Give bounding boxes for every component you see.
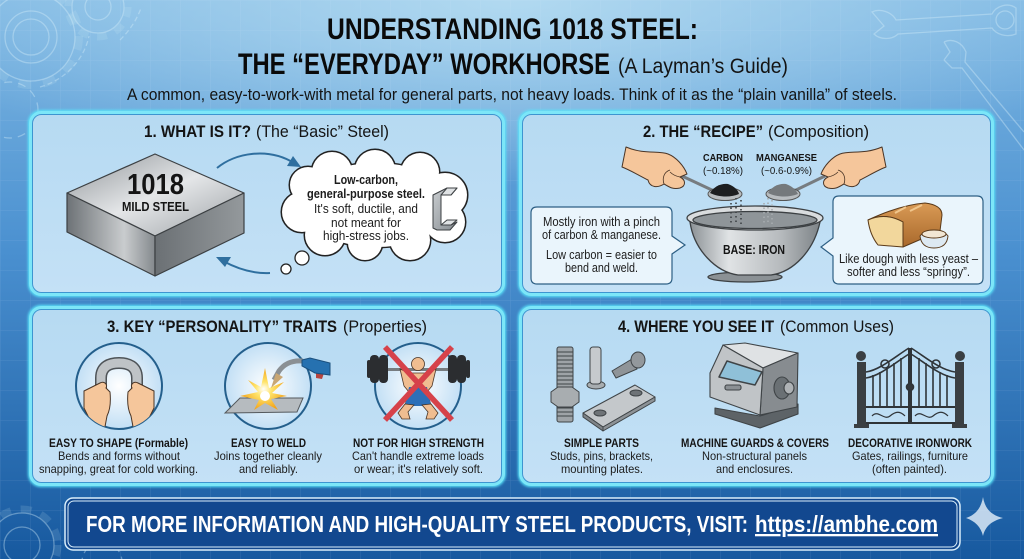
text: not for high strength: NOT FOR HIGH STRENGTH xyxy=(353,436,484,450)
cloud text: general-purpose steel. xyxy=(307,187,425,201)
icon: welding torch xyxy=(225,343,330,429)
text: simple parts: mounting plates. xyxy=(561,462,643,476)
text: easy to weld xyxy=(214,436,322,476)
text: easy to weld: Joins together cleanly xyxy=(214,449,322,463)
text: ironwork: (often painted). xyxy=(872,462,947,476)
icon: machine guard xyxy=(710,343,798,428)
arrow: block to cloud xyxy=(217,154,301,168)
text: machine guards: and enclosures. xyxy=(716,462,793,476)
icon: sparkle xyxy=(966,497,1003,536)
text: easy to shape: Bends and forms without xyxy=(58,449,181,463)
thought cloud xyxy=(281,150,467,274)
heading 4: 4. WHERE YOU SEE IT xyxy=(618,317,775,336)
text: simple parts: SIMPLE PARTS xyxy=(564,436,639,450)
carbon label xyxy=(703,152,743,177)
callout: dough xyxy=(821,196,983,284)
heading 2: 2. THE “RECIPE” xyxy=(643,122,763,141)
cloud text: not meant for xyxy=(331,216,401,230)
callout: dough: Like dough with less yeast – xyxy=(839,252,978,266)
text: ironwork xyxy=(848,436,972,476)
panel 3: traits xyxy=(30,307,504,485)
carbon label: (~0.18%) xyxy=(703,165,743,177)
cloud text: It's soft, ductile, and xyxy=(314,202,418,216)
text: easy to shape: snapping, great for cold working. xyxy=(39,462,198,476)
panel 1: what is it xyxy=(30,112,504,295)
callout: mostly iron: of carbon & manganese. xyxy=(542,228,661,242)
heading 1: 1. WHAT IS IT? xyxy=(144,122,251,141)
callout: dough: softer and less “springy”. xyxy=(847,265,970,279)
heading 2: (Composition) xyxy=(768,122,869,141)
steel block: 1018 xyxy=(127,169,184,201)
heading 1 xyxy=(144,122,389,141)
callout: mostly iron: bend and weld. xyxy=(565,261,638,275)
icon: iron gate xyxy=(854,348,967,428)
title: THE “EVERYDAY” WORKHORSE xyxy=(238,48,610,81)
text: easy to shape xyxy=(39,436,198,476)
callout: mostly iron xyxy=(531,207,685,284)
cloud text xyxy=(307,173,425,243)
text: easy to shape: EASY TO SHAPE (Formable) xyxy=(49,436,188,450)
steel block: MILD STEEL xyxy=(122,199,189,214)
manganese label: (~0.6-0.9%) xyxy=(761,165,812,177)
text: not for high strength: Can't handle extreme loads xyxy=(352,449,484,463)
subtitle: A common, easy-to-work-with metal for general parts, not heavy loads. Think of it as the “plain vanilla” of steels. xyxy=(127,86,897,104)
arrow: cloud to block xyxy=(216,257,270,273)
title: UNDERSTANDING 1018 STEEL: xyxy=(327,13,698,46)
heading 4 xyxy=(618,317,894,336)
text: ironwork: DECORATIVE IRONWORK xyxy=(848,436,972,450)
icon: crossed-out weightlifter xyxy=(367,343,470,429)
title xyxy=(238,13,788,81)
manganese label xyxy=(756,152,817,177)
icon: steel channel xyxy=(433,188,457,230)
decoration: wrenches top right xyxy=(872,5,1024,150)
title: (A Layman’s Guide) xyxy=(618,55,788,78)
left hand with carbon spoon xyxy=(622,147,742,200)
footer banner xyxy=(65,498,960,550)
text: not for high strength xyxy=(352,436,484,476)
icon: bread loaf and bowl xyxy=(868,203,948,248)
heading 3: 3. KEY “PERSONALITY” TRAITS xyxy=(107,317,337,336)
text: machine guards xyxy=(681,436,829,476)
cloud text: high-stress jobs. xyxy=(323,229,409,243)
decoration: gears top left xyxy=(0,0,141,138)
text: simple parts xyxy=(550,436,653,476)
steel block xyxy=(67,154,244,276)
icon: simple parts xyxy=(551,347,655,431)
panel 2: recipe xyxy=(520,112,993,295)
heading 2 xyxy=(643,122,869,141)
panel 4: uses xyxy=(520,307,993,485)
mixing bowl xyxy=(687,206,823,282)
footer banner: FOR MORE INFORMATION AND HIGH-QUALITY STEEL PRODUCTS, VISIT: xyxy=(86,511,748,537)
text: easy to weld: and reliably. xyxy=(239,462,298,476)
carbon label: CARBON xyxy=(703,152,743,164)
heading 1: (The “Basic” Steel) xyxy=(256,122,389,141)
heading 4: (Common Uses) xyxy=(780,317,894,336)
icon: bending metal xyxy=(76,343,162,432)
text: machine guards: Non-structural panels xyxy=(702,449,807,463)
heading 3: (Properties) xyxy=(343,317,427,336)
right hand with manganese spoon xyxy=(766,147,886,200)
callout: mostly iron: Low carbon = easier to xyxy=(546,248,657,262)
bowl label: BASE: IRON xyxy=(723,242,785,257)
manganese label: MANGANESE xyxy=(756,152,817,164)
text: ironwork: Gates, railings, furniture xyxy=(852,449,968,463)
falling powder xyxy=(731,198,772,224)
decoration: gear bottom left xyxy=(0,509,122,559)
text: machine guards: MACHINE GUARDS & COVERS xyxy=(681,436,829,450)
text: easy to weld: EASY TO WELD xyxy=(231,436,306,450)
cloud text: Low-carbon, xyxy=(334,173,398,187)
text: not for high strength: or wear; it's relatively soft. xyxy=(354,462,483,476)
footer banner: https://ambhe.com xyxy=(755,511,938,537)
callout: mostly iron: Mostly iron with a pinch xyxy=(543,215,660,229)
text: simple parts: Studs, pins, brackets, xyxy=(550,449,653,463)
